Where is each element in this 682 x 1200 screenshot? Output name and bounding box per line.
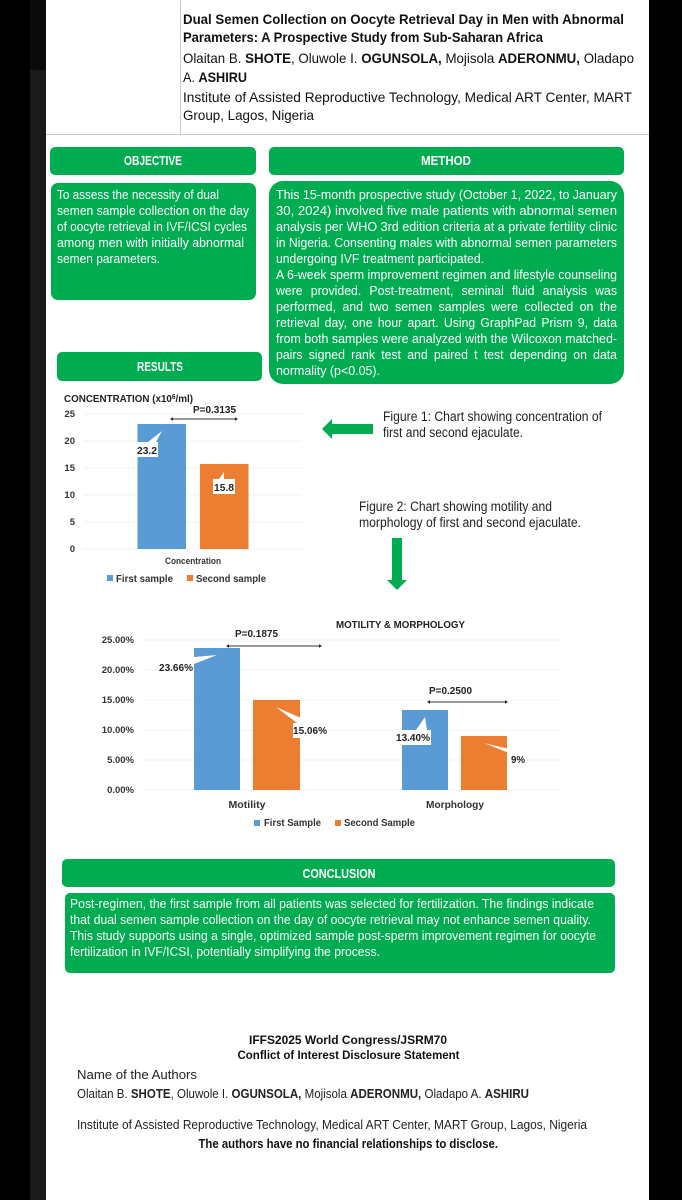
panel: method text: were provided. Post-treatment, seminal fluid analysis was <box>275 283 617 298</box>
data label 15.8: 15.8 <box>214 483 234 494</box>
p value: morphology: P=0.2500 <box>429 685 472 697</box>
arrow: pointing down to figure 2 <box>387 538 407 590</box>
chart title: 6 <box>172 394 176 401</box>
x axis labels <box>228 799 484 811</box>
bar chart: concentration <box>64 393 302 585</box>
panel: method text: retrieval day, one hour apart. Using GraphPad Prism 9, data <box>276 315 618 330</box>
panel: objective text: To assess the necessity of dual <box>57 187 219 202</box>
y axis labels <box>102 635 135 796</box>
panel: method text: in Nigeria. Consenting males with abnormal semen parameters <box>276 235 617 250</box>
panel: conclusion heading <box>62 859 615 887</box>
panel: method text: pairs signed rank test and paired t test depending on data <box>276 347 618 362</box>
panel: objective text: among men with initially abnormal <box>57 235 244 250</box>
legend <box>107 573 266 585</box>
affiliation <box>183 89 632 123</box>
panel: objective text: of oocyte retrieval in IVF/ICSI cycles <box>57 219 247 234</box>
y axis labels: 25 <box>64 409 76 420</box>
disclosure heading <box>238 1035 460 1062</box>
authors: A. ASHIRU <box>183 69 247 85</box>
panel: objective text <box>51 183 256 300</box>
y axis labels: 15.00% <box>102 695 135 706</box>
legend: Second Sample <box>344 817 415 829</box>
y axis labels: 5.00% <box>107 755 135 766</box>
p value: motility: P=0.1875 <box>235 628 278 640</box>
bar: motility first sample <box>194 648 240 790</box>
data label 23.66% <box>158 655 217 674</box>
chart title: /ml) <box>176 393 193 405</box>
figure 1 caption <box>383 409 602 440</box>
institute: Institute of Assisted Reproductive Technology, Medical ART Center, MART Group, Lagos, Nigeria <box>77 1118 587 1132</box>
bar: first sample <box>138 424 186 549</box>
bar: morphology first sample <box>402 710 448 790</box>
y axis labels: 25.00% <box>102 635 135 646</box>
bar: second sample <box>200 464 248 549</box>
authors: Olaitan B. SHOTE, Oluwole I. OGUNSOLA, Mojisola ADERONMU, Oladapo <box>183 50 634 66</box>
figure 2 caption <box>359 499 581 530</box>
affiliation: Institute of Assisted Reproductive Technology, Medical ART Center, MART <box>183 89 632 105</box>
data label 13.40% <box>394 717 431 745</box>
x axis labels: Motility <box>228 799 266 811</box>
y axis labels: 10 <box>64 490 75 501</box>
p value: motility <box>226 628 322 648</box>
y axis labels: 15 <box>64 463 76 474</box>
data label 9% <box>484 743 526 766</box>
data label 23.2: 23.2 <box>137 446 157 457</box>
disclosure sentence: The authors have no financial relationships to disclose. <box>198 1137 498 1151</box>
p value: P=0.3135 <box>193 404 236 416</box>
y axis labels: 20 <box>64 436 75 447</box>
data label 9%: 9% <box>511 755 525 766</box>
legend <box>254 817 415 829</box>
y axis labels <box>64 409 76 555</box>
panel: method text: A 6-week sperm improvement regimen and lifestyle counseling <box>276 267 617 282</box>
legend: Second sample <box>196 573 266 585</box>
panel: objective heading <box>50 147 256 175</box>
bar: morphology second sample <box>461 736 507 790</box>
panel: results heading <box>57 352 262 381</box>
x axis labels: Morphology <box>426 799 484 811</box>
bar: motility second sample <box>253 700 300 790</box>
panel: conclusion heading: CONCLUSION <box>302 867 376 881</box>
panel: objective text: semen sample collection on the day <box>57 203 249 218</box>
y axis labels: 0 <box>70 544 75 555</box>
bar chart: motility and morphology <box>102 619 560 829</box>
panel: method heading <box>269 147 624 175</box>
y axis labels: 0.00% <box>107 785 135 796</box>
authors <box>183 50 634 85</box>
panel: conclusion text: that dual semen sample collection on the day of oocyte retrieval may not enhance semen quality. <box>70 912 591 927</box>
data label 15.06% <box>276 707 328 738</box>
figure 1 caption: Figure 1: Chart showing concentration of <box>383 409 602 424</box>
panel: method text: This 15-month prospective study (October 1, 2022, to January <box>276 187 617 202</box>
header: title, authors and affiliation <box>183 11 634 123</box>
panel: conclusion text: Post-regimen, the first sample from all patients was selected for fertilization. The findings indicate <box>70 896 594 911</box>
panel: conclusion text: fertilization in IVF/ICSI, potentially simplifying the process. <box>70 944 380 959</box>
data label 23.2 <box>136 431 162 457</box>
arrow: pointing left to figure 1 <box>322 419 373 439</box>
panel: method text <box>269 181 624 384</box>
panel: objective heading: OBJECTIVE <box>124 154 182 168</box>
y axis labels: 20.00% <box>102 665 135 676</box>
p value <box>170 404 238 421</box>
figure 2 caption: morphology of first and second ejaculate. <box>359 515 581 530</box>
name of the authors: Name of the Authors <box>77 1067 198 1082</box>
data label 15.8 <box>213 472 235 494</box>
p value: morphology <box>427 685 508 704</box>
panel: method heading: METHOD <box>421 154 471 168</box>
disclosure heading: IFFS2025 World Congress/JSRM70 <box>249 1035 447 1047</box>
figure 2 caption: Figure 2: Chart showing motility and <box>359 499 552 514</box>
panel: method text: normality (p<0.05). <box>276 363 380 378</box>
disclosure heading: Conflict of Interest Disclosure Statement <box>238 1048 460 1062</box>
figure 1 caption: first and second ejaculate. <box>383 425 523 440</box>
affiliation: Group, Lagos, Nigeria <box>183 107 314 123</box>
authors list: Olaitan B. SHOTE, Oluwole I. OGUNSOLA, Mojisola ADERONMU, Oladapo A. ASHIRU <box>77 1087 529 1101</box>
legend: First Sample <box>264 817 321 829</box>
y axis labels: 10.00% <box>102 725 135 736</box>
panel: method text: analysis per WHO 3rd edition criteria at a private fertility clinic <box>276 219 617 234</box>
data label 23.66%: 23.66% <box>159 663 193 674</box>
panel: results heading: RESULTS <box>137 360 183 374</box>
chart title: MOTILITY & MORPHOLOGY <box>336 619 465 631</box>
chart title: CONCENTRATION (x10 <box>64 393 179 405</box>
panel: objective text: semen parameters. <box>57 251 160 266</box>
legend: First sample <box>116 573 173 585</box>
panel: method text: performed, and two semen samples were collected on the <box>276 299 617 314</box>
data label 13.40%: 13.40% <box>396 733 430 744</box>
data label 15.06%: 15.06% <box>293 726 327 737</box>
panel: method text: from both samples were analyzed with the Wilcoxon matched- <box>276 331 617 346</box>
panel: conclusion text: This study supports using a single, optimized sample post-sperm improvement regimen for oocyte <box>70 928 596 943</box>
disclosure statement <box>77 1035 587 1151</box>
title <box>183 11 624 45</box>
panel: method text: 30, 2024) involved five male patients with abnormal semen <box>276 203 617 218</box>
y axis labels: 5 <box>70 517 76 528</box>
x axis label: Concentration <box>165 556 221 566</box>
panel: conclusion text <box>65 893 615 973</box>
panel: method text: undergoing IVF treatment participated. <box>276 251 484 266</box>
title: Parameters: A Prospective Study from Sub-Saharan Africa <box>183 29 543 45</box>
title: Dual Semen Collection on Oocyte Retrieval Day in Men with Abnormal <box>183 11 624 27</box>
